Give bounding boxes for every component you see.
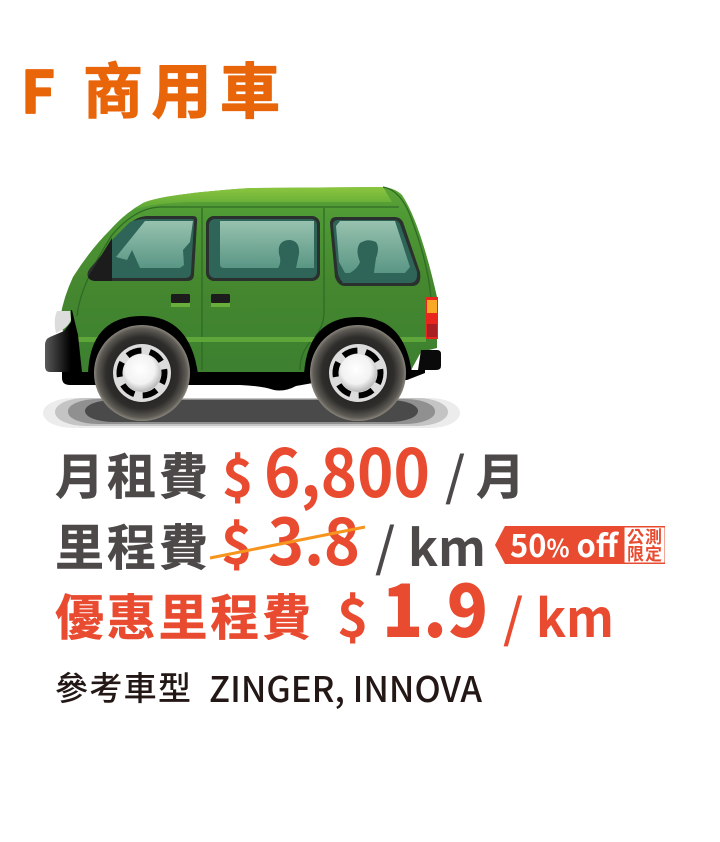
rear wheel xyxy=(310,325,406,421)
discounted mileage fee row xyxy=(55,553,614,658)
front wheel xyxy=(94,325,190,421)
discounted mileage fee row: 1.9 xyxy=(382,553,488,658)
monthly rent row: 月 xyxy=(476,438,525,509)
front window xyxy=(88,216,197,281)
50% off badge: 公測 xyxy=(627,523,662,548)
van underbody xyxy=(62,370,425,390)
van side stripe xyxy=(78,337,426,342)
50% off badge: 限定 xyxy=(627,540,662,565)
front bumper xyxy=(45,310,82,372)
van panel lines xyxy=(77,187,431,370)
title: F xyxy=(21,46,55,130)
front headlight xyxy=(55,311,71,333)
mileage fee row: 3.8 xyxy=(268,492,360,584)
van roof highlight xyxy=(135,187,392,209)
monthly rent row xyxy=(55,421,525,517)
strikethrough line xyxy=(210,527,365,558)
mileage fee row xyxy=(55,492,486,584)
reference models xyxy=(55,662,482,713)
reference models: ZINGER, INNOVA xyxy=(209,662,482,713)
reference models: 參考車型 xyxy=(55,662,191,710)
monthly rent row: $ xyxy=(222,437,253,513)
monthly rent row: 月租費 xyxy=(55,438,208,509)
mileage fee row: km xyxy=(408,509,486,581)
middle window xyxy=(206,216,320,281)
rear bumper xyxy=(418,350,441,370)
discounted mileage fee row: / xyxy=(503,577,523,652)
van body xyxy=(60,187,437,372)
monthly rent row: / xyxy=(445,435,465,510)
discounted mileage fee row: 優惠里程費 xyxy=(55,579,311,650)
mileage fee row: $ xyxy=(221,504,252,580)
title: 商用車 xyxy=(83,44,280,131)
front wheel arch xyxy=(88,316,198,374)
door handles xyxy=(171,294,230,307)
rear tail lamp xyxy=(426,297,438,339)
discounted mileage fee row: $ xyxy=(337,577,368,653)
icon: green van xyxy=(43,187,460,428)
mileage fee row: 里程費 xyxy=(55,509,208,580)
rear wheel arch xyxy=(304,317,412,374)
van ground shadow xyxy=(43,398,460,428)
mileage fee row: / xyxy=(375,506,395,581)
rear window xyxy=(330,217,420,286)
discounted mileage fee row: km xyxy=(536,577,614,652)
50% off badge: 50% off xyxy=(510,521,620,566)
50% off badge xyxy=(495,521,665,566)
monthly rent row: 6,800 xyxy=(264,421,430,517)
